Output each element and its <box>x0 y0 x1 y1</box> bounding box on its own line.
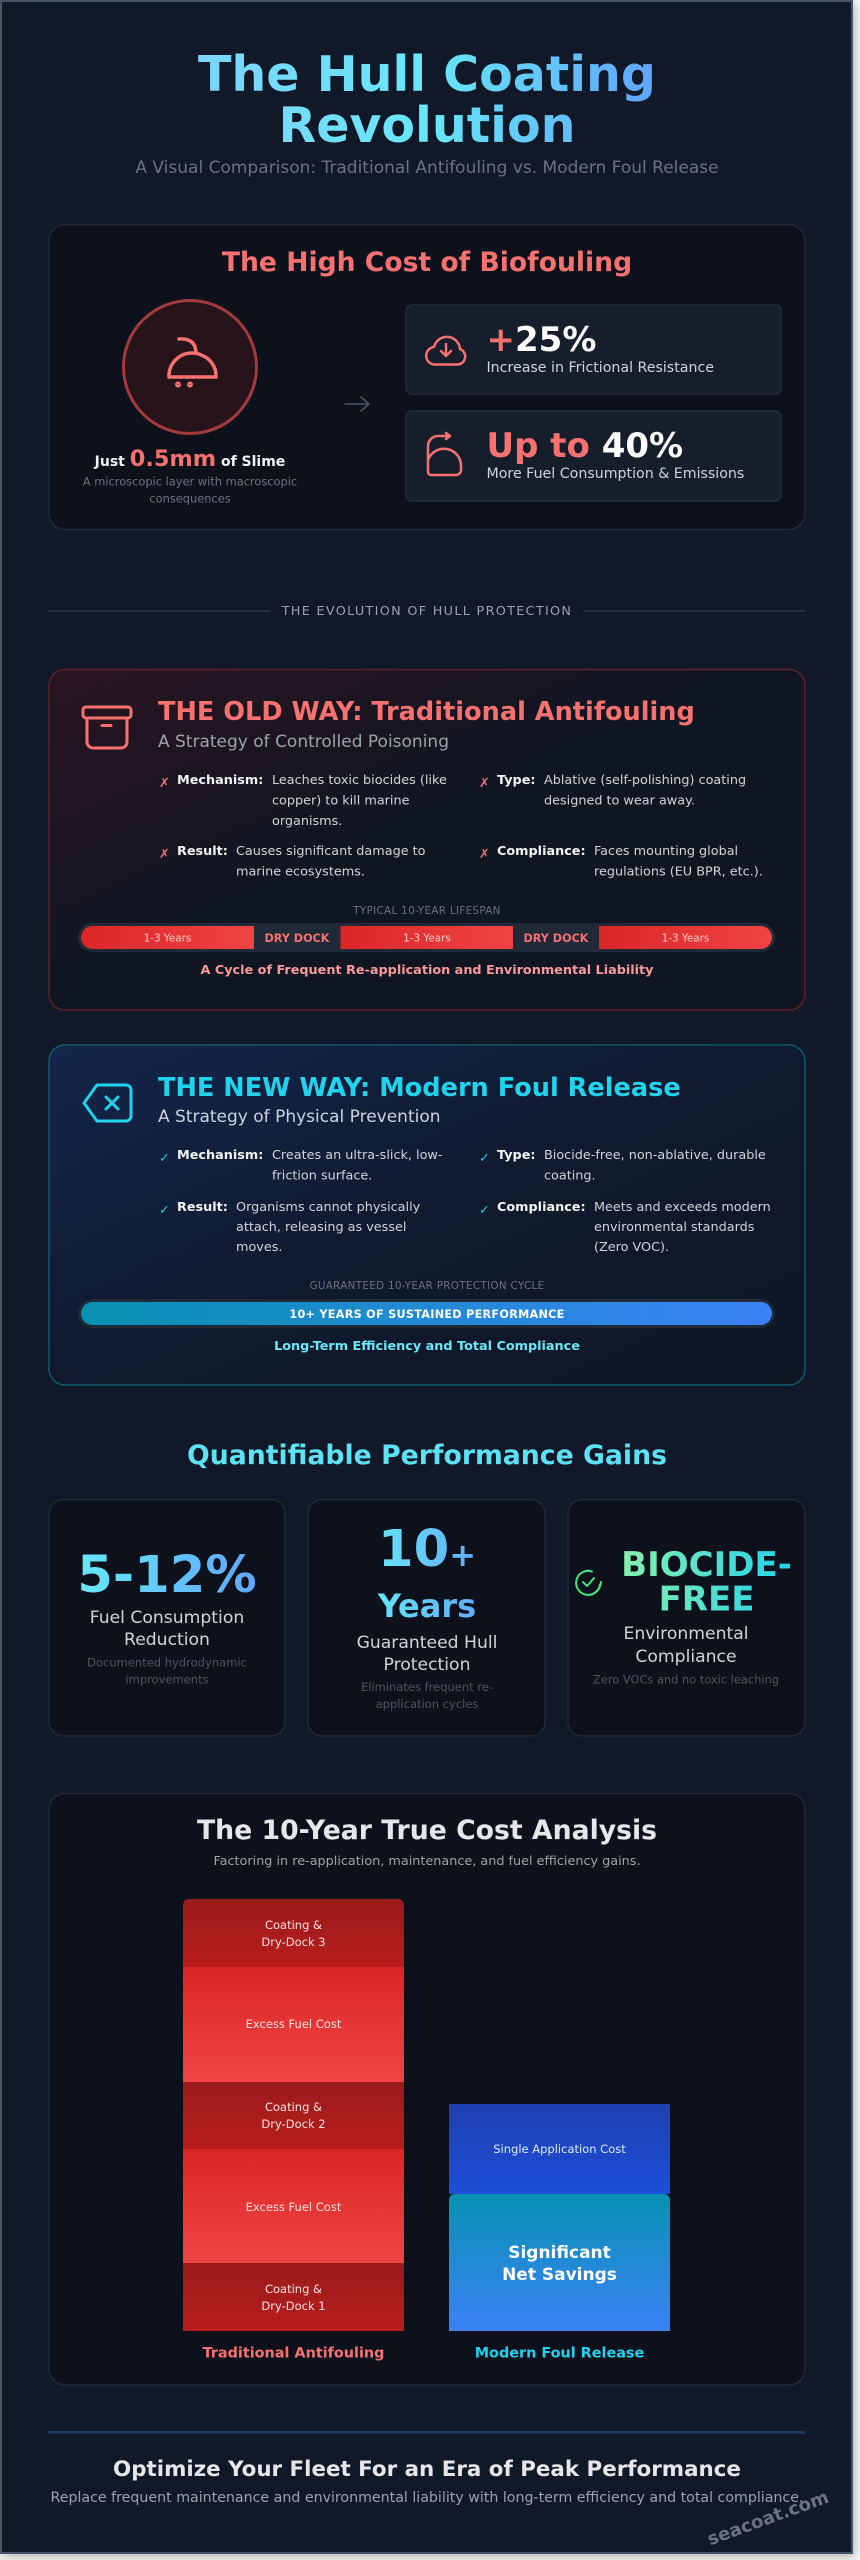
stacked bar: modern foul release: Single Application Cost <box>493 2142 626 2156</box>
stacked bar: traditional antifouling: Dry-Dock 3 <box>261 1935 326 1949</box>
card: hull protection <box>308 1500 545 1736</box>
panel: high cost of biofouling <box>49 224 805 530</box>
list: new way attributes <box>159 1148 771 1255</box>
list: old way attributes: Faces mounting global <box>594 844 738 859</box>
stacked bar: traditional antifouling: Excess Fuel Cost <box>246 2200 342 2214</box>
timeline: protection cycle: 10+ YEARS OF SUSTAINED PERFORMANCE <box>289 1308 565 1321</box>
card: biocide free: Environmental <box>623 1624 749 1644</box>
card: fuel reduction: Fuel Consumption <box>90 1608 244 1628</box>
stat: fuel consumption <box>406 411 781 501</box>
heading: performance gains: Quantifiable Performance Gains <box>187 1440 667 1471</box>
list: old way attributes: Mechanism: <box>177 773 263 788</box>
timeline: 10-year lifespan: 1-3 Years <box>144 932 191 944</box>
subheading: cost analysis: Factoring in re-application, maintenance, and fuel efficiency gains. <box>213 1854 641 1869</box>
subheading: new way: A Strategy of Physical Prevention <box>158 1107 441 1127</box>
list: old way attributes: Causes significant damage to <box>236 844 426 859</box>
section divider: THE EVOLUTION OF HULL PROTECTION <box>281 604 572 619</box>
subtitle: A Visual Comparison: Traditional Antifouling vs. Modern Foul Release <box>135 158 719 178</box>
stacked bar: traditional antifouling: Dry-Dock 1 <box>261 2299 326 2313</box>
list: new way attributes: ✓ <box>479 1203 490 1218</box>
list: new way attributes: Type: <box>497 1148 536 1163</box>
footer: Optimize Your Fleet For an Era of Peak Performance <box>113 2457 741 2482</box>
card: hull protection: Guaranteed Hull <box>357 1633 497 1653</box>
icon: leaf check <box>576 1571 601 1595</box>
card: fuel reduction: Documented hydrodynamic <box>87 1656 247 1670</box>
list: old way attributes: ✗ <box>479 847 490 862</box>
icon: fuel route <box>428 433 461 475</box>
list: new way attributes: Mechanism: <box>177 1148 263 1163</box>
list: old way attributes: designed to wear away. <box>544 794 695 808</box>
footer: Replace frequent maintenance and environmental liability with long-term efficiency and total compliance. <box>51 2490 803 2506</box>
list: new way attributes: friction surface. <box>272 1168 372 1184</box>
card: hull protection: Eliminates frequent re- <box>361 1680 493 1694</box>
watermark: seacoat.com <box>705 2487 832 2550</box>
subheading: old way: A Strategy of Controlled Poisoning <box>158 732 449 752</box>
card: hull protection: 10+ <box>378 1519 476 1579</box>
list: old way attributes: Leaches toxic biocides (like <box>272 773 447 788</box>
stat: fuel consumption: Up to 40% <box>486 426 683 466</box>
heading: biofouling: The High Cost of Biofouling <box>222 247 632 278</box>
stacked bar: modern foul release: Net Savings <box>502 2265 617 2285</box>
timeline: 10-year lifespan: 1-3 Years <box>403 932 451 944</box>
stat: fuel consumption: More Fuel Consumption & Emissions <box>486 466 744 482</box>
list: old way attributes: organisms. <box>272 814 342 829</box>
list: new way attributes: Biocide-free, non-ablative, durable <box>544 1148 766 1163</box>
stacked bar: traditional antifouling: Coating & <box>265 1918 322 1932</box>
list: new way attributes: ✓ <box>159 1151 170 1166</box>
slime caption: Just 0.5mm of Slime <box>94 446 285 472</box>
card: hull protection: Protection <box>384 1655 470 1675</box>
stacked bar: traditional antifouling: Dry-Dock 2 <box>261 2117 326 2131</box>
timeline: protection cycle <box>78 1280 775 1328</box>
list: old way attributes: marine ecosystems. <box>236 864 365 880</box>
list: new way attributes: Meets and exceeds modern <box>594 1200 771 1215</box>
stacked bar: traditional antifouling: Coating & <box>265 2282 322 2296</box>
list: old way attributes: ✗ <box>159 847 170 862</box>
list: new way attributes: moves. <box>236 1240 282 1255</box>
footer <box>48 2431 805 2506</box>
label: traditional: Traditional Antifouling <box>203 2346 384 2362</box>
list: old way attributes: regulations (EU BPR, etc.). <box>594 864 763 880</box>
stacked bar: traditional antifouling: Coating & <box>265 2100 322 2114</box>
card: fuel reduction <box>49 1500 285 1736</box>
card: biocide free: Zero VOCs and no toxic leaching <box>593 1672 779 1686</box>
slime caption: A microscopic layer with macroscopic <box>83 474 297 488</box>
list: old way attributes: ✗ <box>159 776 170 791</box>
title <box>198 46 656 154</box>
title: Revolution <box>278 97 576 154</box>
panel: the new way <box>49 1045 805 1385</box>
list: old way attributes: copper) to kill marine <box>272 794 410 808</box>
icon: slime bell <box>169 339 216 386</box>
list: new way attributes: ✓ <box>479 1151 490 1166</box>
list: old way attributes: Type: <box>497 773 536 788</box>
stacked bar: traditional antifouling: Excess Fuel Cost <box>246 2017 342 2031</box>
slime circle with icon <box>124 300 256 434</box>
label: modern: Modern Foul Release <box>475 2346 644 2362</box>
timeline: 10-year lifespan: DRY DOCK <box>265 932 331 945</box>
list: new way attributes: environmental standards <box>594 1220 755 1235</box>
timeline: 10-year lifespan: 1-3 Years <box>662 932 709 944</box>
slime caption: consequences <box>149 492 231 506</box>
card: hull protection: Years <box>377 1587 476 1625</box>
timeline: 10-year lifespan <box>78 905 775 952</box>
caption: old way: A Cycle of Frequent Re-application and Environmental Liability <box>200 963 654 978</box>
stat: frictional resistance: Increase in Frictional Resistance <box>486 360 714 376</box>
icon: tag with x <box>84 1085 131 1121</box>
timeline: protection cycle: GUARANTEED 10-YEAR PROTECTION CYCLE <box>310 1280 544 1292</box>
stacked bar: traditional antifouling <box>183 1899 404 2331</box>
list: old way attributes: Result: <box>177 844 228 859</box>
list: new way attributes: Creates an ultra-slick, low- <box>272 1148 443 1163</box>
card: fuel reduction: Reduction <box>124 1630 210 1650</box>
list: old way attributes <box>159 773 763 880</box>
card: biocide free: BIOCIDE- <box>621 1545 792 1585</box>
icon: archive box <box>83 707 131 748</box>
list: old way attributes: Compliance: <box>497 844 586 859</box>
panel: the old way <box>49 670 805 1010</box>
list: new way attributes: Compliance: <box>497 1200 586 1215</box>
list: old way attributes: Ablative (self-polishing) coating <box>544 773 746 788</box>
card: biocide free: Compliance <box>635 1647 737 1667</box>
card: fuel reduction: improvements <box>125 1672 209 1686</box>
list: new way attributes: coating. <box>544 1168 596 1184</box>
panel: true cost analysis <box>49 1794 805 2385</box>
slime caption <box>83 446 297 506</box>
stat: frictional resistance: +25% <box>486 320 596 360</box>
stacked bar: modern foul release <box>449 2104 670 2331</box>
heading: new way: THE NEW WAY: Modern Foul Release <box>158 1073 681 1103</box>
icon: cloud download <box>426 337 465 365</box>
stat: frictional resistance <box>406 305 781 394</box>
heading: old way: THE OLD WAY: Traditional Antifouling <box>158 697 695 727</box>
timeline: 10-year lifespan: DRY DOCK <box>524 932 590 945</box>
card: fuel reduction: 5-12% <box>77 1545 257 1605</box>
stacked bar: modern foul release: Significant <box>508 2243 611 2263</box>
arrow <box>345 397 369 411</box>
card: hull protection: application cycles <box>376 1697 478 1711</box>
title: The Hull Coating <box>198 46 656 103</box>
card: biocide free <box>568 1500 805 1736</box>
timeline: 10-year lifespan: TYPICAL 10-YEAR LIFESPAN <box>352 905 501 917</box>
heading: cost analysis: The 10-Year True Cost Analysis <box>197 1815 657 1846</box>
list: new way attributes: ✓ <box>159 1203 170 1218</box>
list: new way attributes: Organisms cannot physically <box>236 1200 421 1215</box>
card: biocide free: FREE <box>659 1580 754 1620</box>
list: old way attributes: ✗ <box>479 776 490 791</box>
caption: new way: Long-Term Efficiency and Total Compliance <box>274 1339 580 1354</box>
list: new way attributes: Result: <box>177 1200 228 1215</box>
list: new way attributes: attach, releasing as vessel <box>236 1220 406 1235</box>
list: new way attributes: (Zero VOC). <box>594 1240 669 1255</box>
